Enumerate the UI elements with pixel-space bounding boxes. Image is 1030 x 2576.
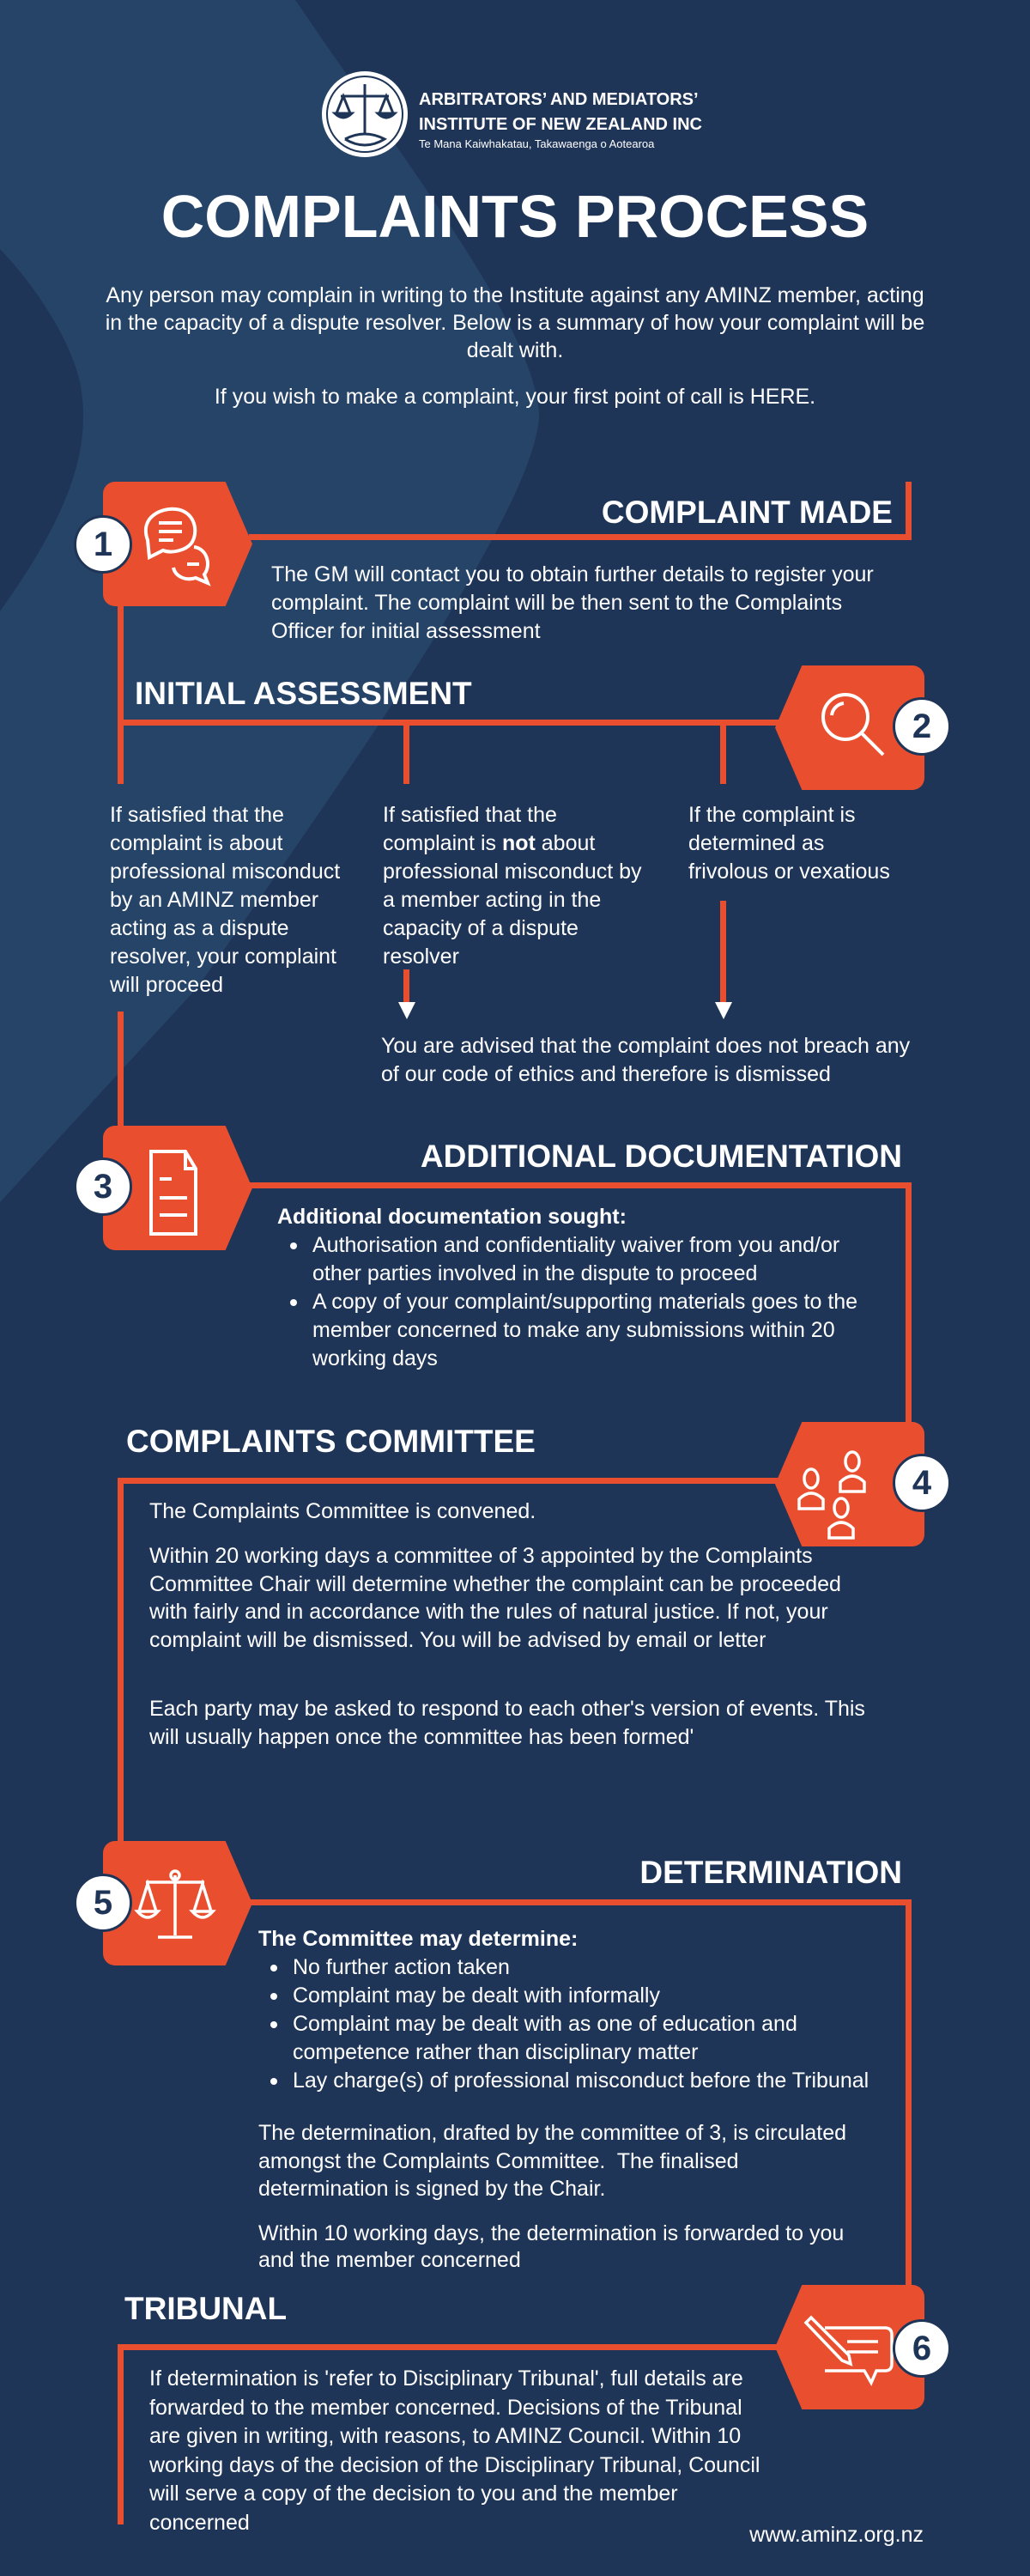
text: tribunal: are given in writing, with reasons, to AMINZ Council. Within 10 (149, 2424, 741, 2448)
number 1: 1 (94, 526, 112, 563)
text: additional documentation: Authorisation and confidentiality waiver from you and/or (312, 1233, 839, 1257)
text: complaint made: Officer for initial assessment (271, 619, 541, 643)
logo: ARBITRATORS’ AND MEDIATORS’ (419, 90, 699, 109)
icon: message writing (775, 2285, 924, 2409)
text: determination (258, 1927, 869, 2093)
intro text (106, 283, 924, 362)
intro text: dealt with. (467, 338, 563, 362)
number 3: 3 (94, 1168, 112, 1206)
text: Committee Chair will determine whether the complaint can be proceeded (149, 1571, 841, 1595)
text: committee: The Complaints Committee is convened. (149, 1499, 536, 1523)
step 6 (776, 2285, 948, 2409)
text: determination: Lay charge(s) of professional misconduct before the Tribunal (293, 2069, 869, 2093)
intro text: in the capacity of a dispute resolver. Below is a summary of how your complaint will be (106, 311, 924, 335)
text: amongst the Complaints Committee. The finalised (258, 2148, 739, 2172)
column: proceed: complaint is about (110, 831, 283, 855)
text: tribunal: working days of the decision of the Disciplinary Tribunal, Council (149, 2452, 760, 2476)
number 6 (893, 2319, 951, 2378)
icon: speech bubbles (103, 482, 252, 606)
column: proceed (110, 803, 340, 997)
text: additional documentation (277, 1205, 857, 1370)
number 4 (893, 1454, 951, 1512)
text: and the member concerned (258, 2248, 521, 2272)
column: proceed: If satisfied that the (110, 803, 284, 827)
text: Each party may be asked to respond to each other's version of events. This (149, 1697, 865, 1721)
text: complaint will be dismissed. You will be advised by email or letter (149, 1628, 766, 1652)
step 2 (775, 665, 948, 790)
text: determination: competence rather than disciplinary matter (293, 2040, 698, 2064)
column: frivolous: frivolous or vexatious (688, 860, 890, 884)
text: will usually happen once the committee has been formed' (149, 1725, 694, 1749)
number 3 (74, 1157, 132, 1216)
heading: initial assessment: INITIAL ASSESSMENT (135, 676, 472, 711)
column: frivolous (688, 803, 890, 884)
column: not misconduct: a member acting in the (383, 888, 601, 912)
title: COMPLAINTS PROCESS (161, 183, 869, 250)
text: determination is signed by the Chair. (258, 2177, 605, 2201)
text: additional documentation: Additional documentation sought: (277, 1205, 627, 1229)
column: proceed: will proceed (110, 973, 223, 997)
logo: INSTITUTE OF NEW ZEALAND INC (419, 115, 702, 134)
column: frivolous: determined as (688, 831, 824, 855)
background swoosh (0, 0, 539, 1202)
footer url: www.aminz.org.nz (749, 2523, 924, 2547)
text: dismissed: You are advised that the complaint does not breach any (381, 1034, 910, 1058)
heading: tribunal: TRIBUNAL (124, 2291, 287, 2326)
number 5: 5 (94, 1884, 112, 1922)
icon: people (775, 1422, 924, 1546)
column: not misconduct: complaint is not about (383, 831, 595, 855)
text: complaint made: complaint. The complaint will be then sent to the Complaints (271, 591, 842, 615)
text: determination: No further action taken (293, 1955, 510, 1979)
heading: complaint made: COMPLAINT MADE (602, 495, 893, 530)
logo: Te Mana Kaiwhakatau, Takawaenga o Aotearoa (419, 137, 654, 150)
text: complaint made: The GM will contact you to obtain further details to register your (271, 562, 874, 586)
number 2 (893, 697, 951, 756)
step 3 (76, 1126, 252, 1250)
intro text: Any person may complain in writing to the Institute against any AMINZ member, acting (106, 283, 924, 307)
column: not misconduct: resolver (383, 945, 459, 969)
intro call to action: If you wish to make a complaint, your first point of call is HERE. (215, 385, 815, 409)
number 6: 6 (912, 2330, 931, 2367)
text: Within 10 working days, the determination is forwarded to you (258, 2221, 844, 2245)
text: additional documentation: other parties involved in the dispute to proceed (312, 1261, 757, 1285)
column: proceed: professional misconduct (110, 860, 340, 884)
column: proceed: acting as a dispute (110, 916, 288, 940)
text: additional documentation: A copy of your complaint/supporting materials goes to the (312, 1290, 857, 1314)
heading: additional documentation: ADDITIONAL DOCUMENTATION (421, 1139, 902, 1174)
text: determination: Complaint may be dealt with informally (293, 1984, 660, 2008)
icon: document (103, 1126, 252, 1250)
text: dismissed: of our code of ethics and therefore is dismissed (381, 1062, 831, 1086)
column: frivolous: If the complaint is (688, 803, 856, 827)
text: additional documentation: member concerned to make any submissions within 20 (312, 1318, 835, 1342)
column: not misconduct: If satisfied that the (383, 803, 557, 827)
text: dismissed (381, 1034, 910, 1086)
number 5 (74, 1874, 132, 1932)
step 4 (775, 1422, 948, 1546)
text: determination: The Committee may determine: (258, 1927, 578, 1951)
number 4: 4 (912, 1464, 931, 1502)
text: tribunal (149, 2366, 760, 2535)
icon: logo scales (322, 71, 408, 157)
text: The determination, drafted by the committee of 3, is circulated (258, 2121, 846, 2145)
column: proceed: resolver, your complaint (110, 945, 336, 969)
text: determination: Complaint may be dealt with as one of education and (293, 2012, 797, 2036)
icon: scales (103, 1841, 252, 1965)
text: tribunal: concerned (149, 2511, 250, 2535)
text: tribunal: forwarded to the member concerned. Decisions of the Tribunal (149, 2396, 742, 2420)
text: tribunal: will serve a copy of the decision to you and the member (149, 2482, 678, 2506)
text: complaint made (271, 562, 874, 643)
arrow: frivolous (715, 1002, 732, 1019)
logo (322, 71, 702, 157)
text: with fairly and in accordance with the rules of natural justice. If not, your (149, 1600, 828, 1624)
number 2: 2 (912, 708, 931, 745)
text: tribunal: If determination is 'refer to Disciplinary Tribunal', full details are (149, 2366, 743, 2391)
column: not misconduct (383, 803, 642, 969)
column: not misconduct: professional misconduct by (383, 860, 642, 884)
text: Within 20 working days a committee of 3 appointed by the Complaints (149, 1544, 813, 1568)
arrow: not misconduct (398, 1002, 415, 1019)
column: not misconduct: capacity of a dispute (383, 916, 579, 940)
icon: magnifier (775, 665, 924, 790)
heading: complaints committee: COMPLAINTS COMMITTEE (126, 1424, 536, 1459)
column: proceed: by an AMINZ member (110, 888, 318, 912)
heading: determination: DETERMINATION (639, 1855, 902, 1890)
text: additional documentation: working days (312, 1346, 438, 1370)
step 5 (76, 1841, 251, 1965)
number 1 (74, 515, 132, 574)
step 1 (74, 482, 252, 606)
